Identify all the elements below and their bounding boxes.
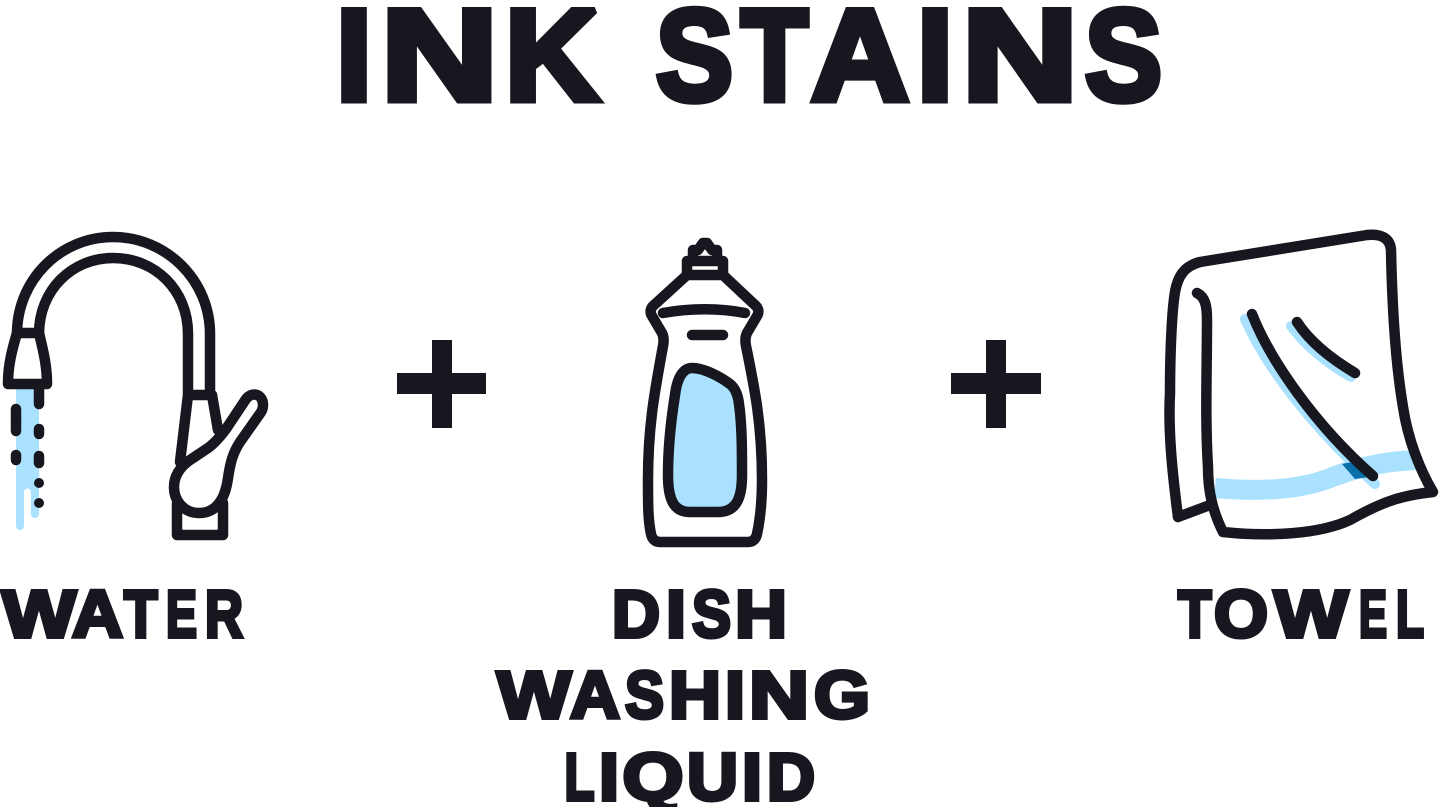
label: towel: W (1274, 577, 1349, 652)
icon: dish washing liquid bottle (648, 243, 762, 542)
label: dish washing liquid: H (735, 577, 787, 652)
label: dish washing liquid: G (814, 658, 870, 733)
label: towel: E (1359, 577, 1387, 652)
label: dish washing liquid: N (749, 658, 809, 733)
label: dish washing liquid: S (692, 577, 731, 652)
label: dish washing liquid: I (666, 577, 686, 652)
label: dish washing liquid: H (669, 658, 721, 733)
label: dish washing liquid: W (497, 658, 572, 733)
plus sign 1 (397, 340, 486, 428)
plus sign 2 (951, 340, 1041, 428)
label: towel: T (1178, 577, 1212, 652)
icon: water faucet (8, 237, 263, 535)
label: dish washing liquid: I (725, 658, 745, 733)
label: towel: L (1396, 577, 1424, 652)
label: dish washing liquid: A (570, 658, 620, 733)
label: dish washing liquid (497, 577, 870, 807)
label: towel: O (1214, 577, 1268, 652)
label: water: T (124, 577, 158, 652)
label: dish washing liquid: D (612, 577, 660, 652)
label: water: W (2, 577, 77, 652)
icon: towel (1169, 235, 1433, 534)
label: water: E (166, 577, 197, 652)
label: dish washing liquid: S (625, 658, 664, 733)
label: water: R (205, 577, 243, 652)
label: water: A (72, 577, 123, 652)
